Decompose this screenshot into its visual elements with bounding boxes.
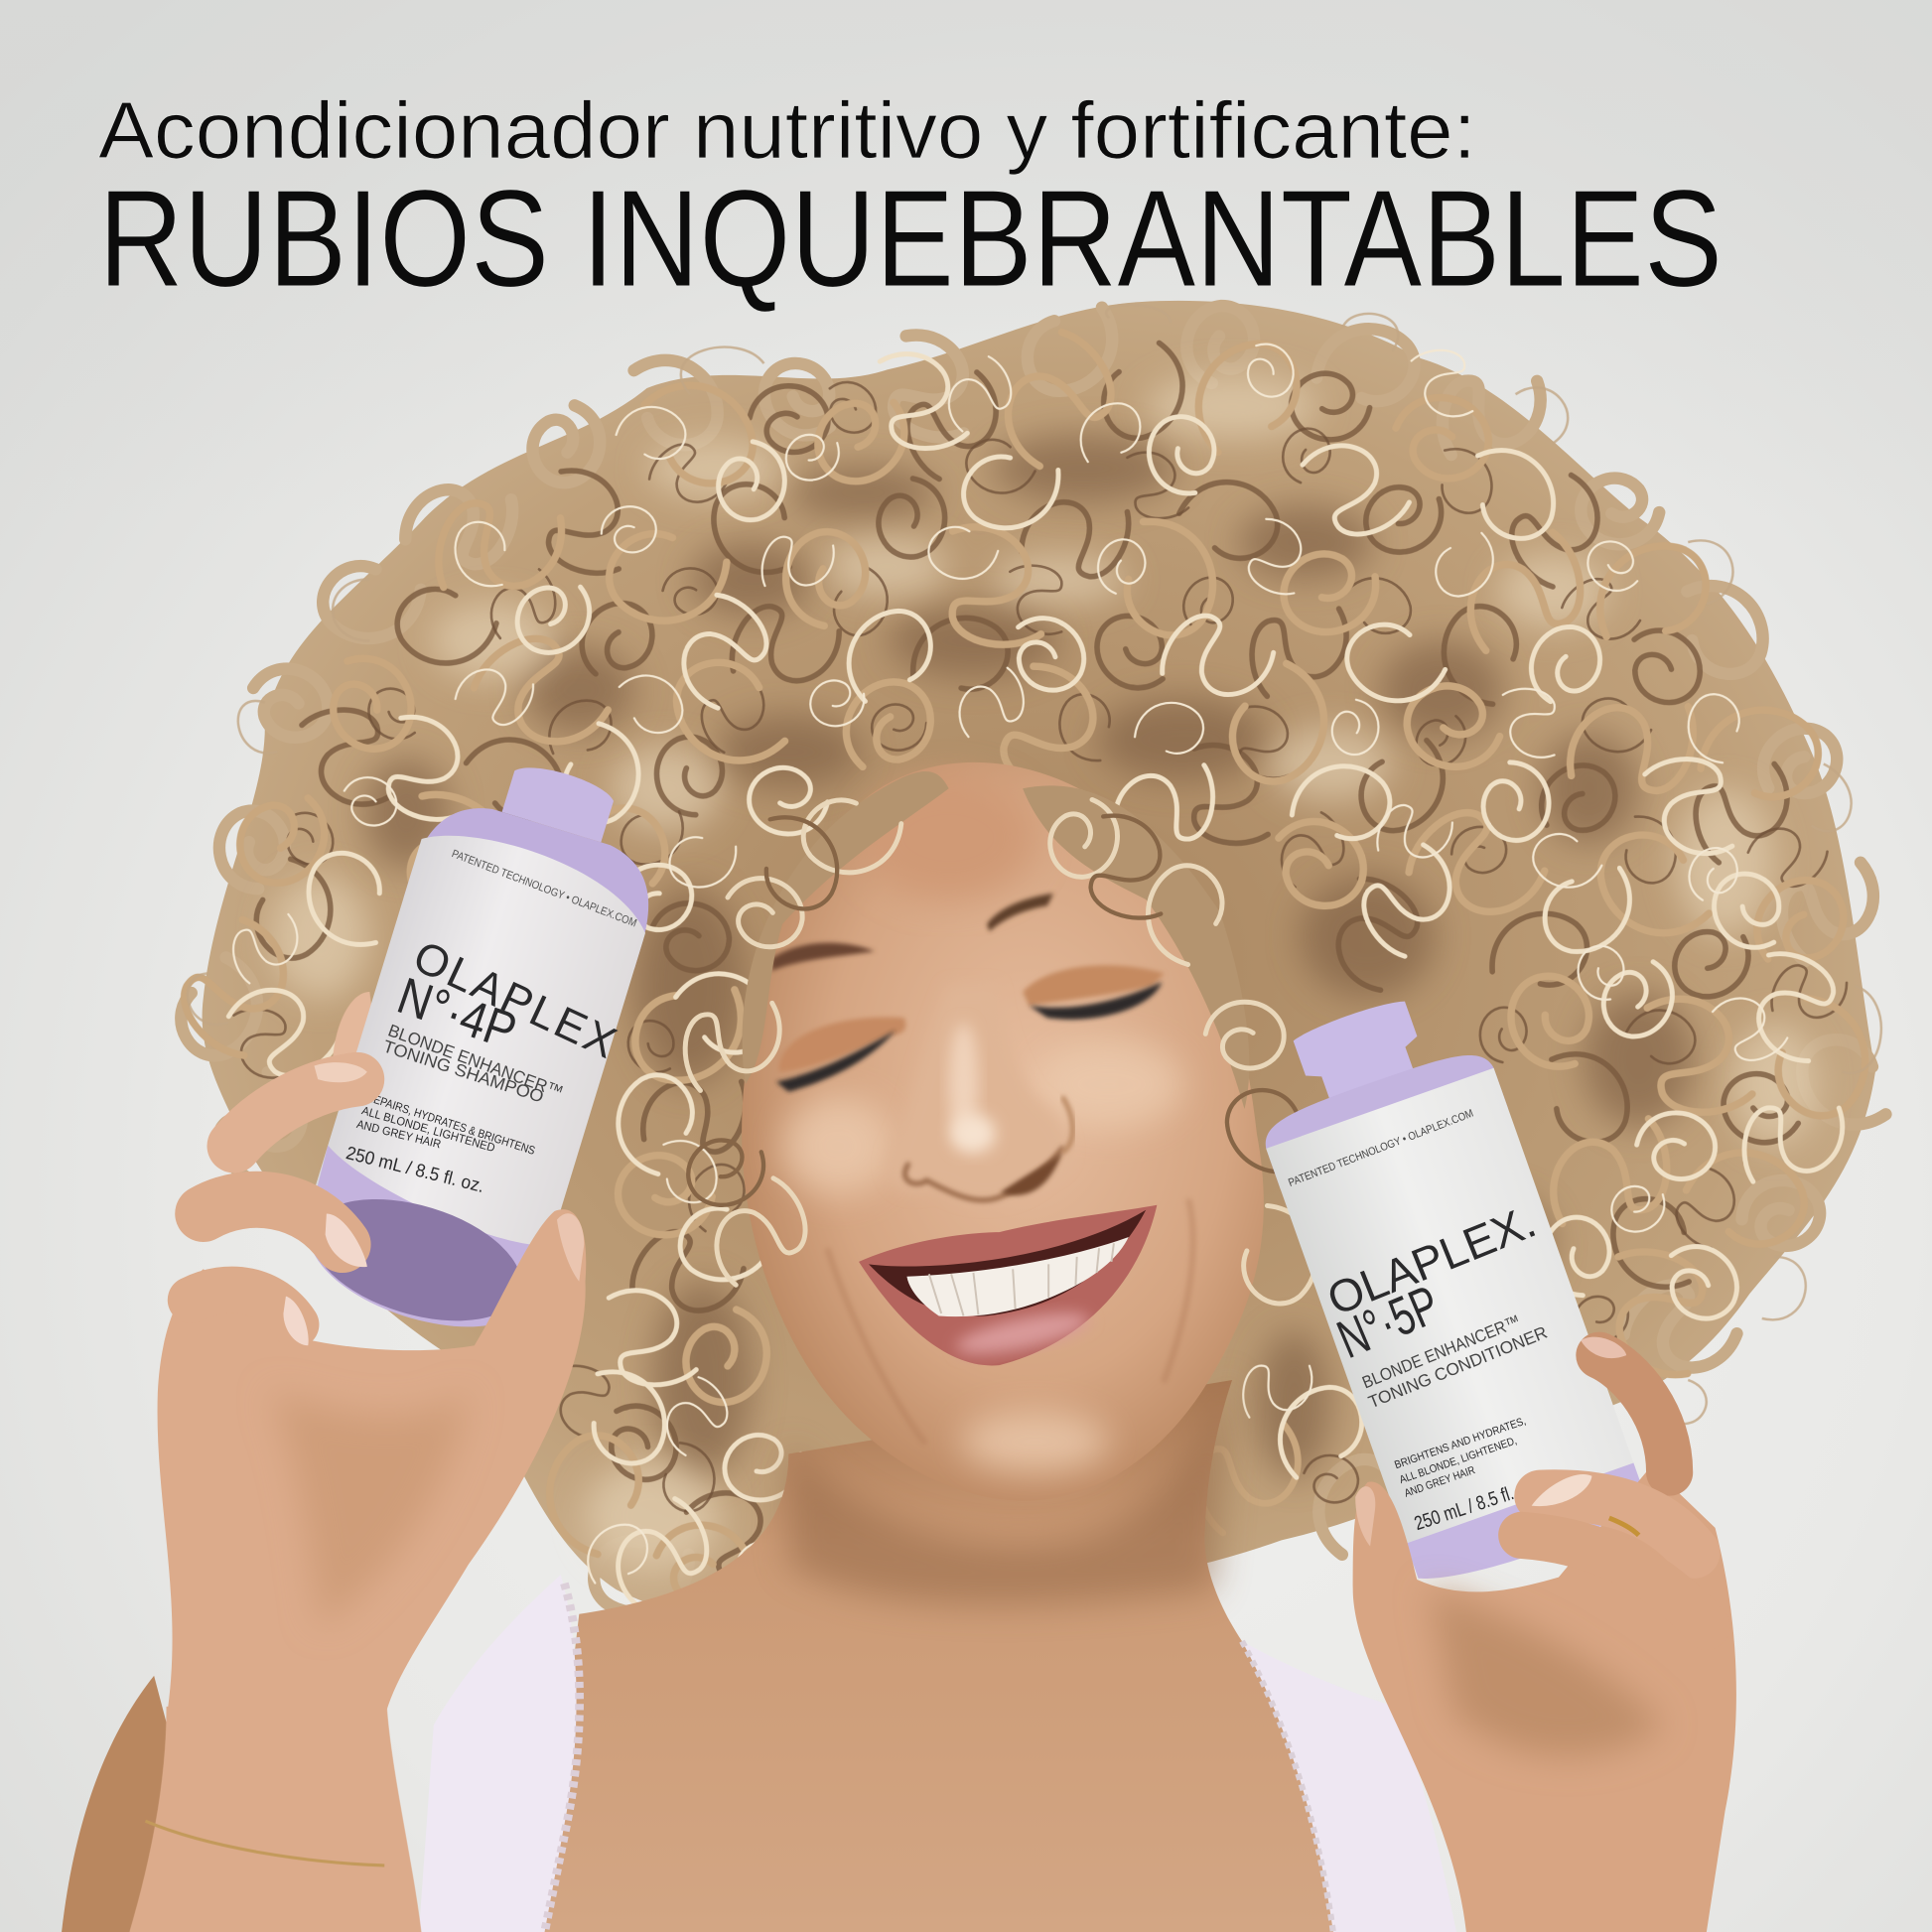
- shampoo label text: N°·4P: [390, 967, 523, 1061]
- left eyelid: [778, 1017, 905, 1072]
- title line one: Acondicionador nutritivo y fortificante:: [98, 86, 1476, 176]
- shampoo shoulder: [403, 792, 667, 969]
- right top strap: [1242, 1641, 1456, 1932]
- conditioner label text: BLONDE ENHANCER™: [1359, 1311, 1523, 1392]
- right eyebrow: [987, 894, 1053, 931]
- right eyelid: [1023, 965, 1165, 1006]
- shampoo label: [310, 819, 658, 1275]
- shampoo label text: AND GREY HAIR: [355, 1118, 442, 1152]
- conditioner label text: [1287, 1108, 1550, 1535]
- shampoo cap: [502, 759, 618, 842]
- conditioner base: [1406, 1462, 1651, 1593]
- left top strap: [419, 1575, 580, 1932]
- tooth gaps: [929, 1243, 1114, 1315]
- shampoo label text: OLAPLEX: [406, 932, 623, 1068]
- title: [98, 86, 1723, 316]
- shampoo bottle No.4P: [287, 739, 683, 1351]
- conditioner label text: ALL BLONDE, LIGHTENED,: [1398, 1435, 1518, 1486]
- irregular hair edge: [166, 294, 1890, 1629]
- middle finger: [204, 1199, 343, 1244]
- neck shadow: [788, 1368, 1232, 1604]
- ring finger: [191, 1290, 296, 1324]
- left shoulder and upper arm: [62, 1676, 221, 1932]
- forehead glow: [863, 776, 1035, 899]
- conditioner bottle No.5P: [1233, 976, 1651, 1593]
- shampoo label text: REPAIRS, HYDRATES & BRIGHTENS: [365, 1091, 537, 1158]
- shampoo label text: [345, 848, 638, 1196]
- right eyelashes: [1029, 982, 1162, 1020]
- shampoo label text: TONING SHAMPOO: [380, 1035, 546, 1107]
- conditioner label text: N°·5P: [1329, 1274, 1448, 1370]
- mid tone curl strands: [161, 323, 1883, 1621]
- middle fingernail: [326, 1213, 367, 1267]
- fingertip behind bottle: [333, 992, 382, 1084]
- flyaway strands: [188, 305, 1881, 1424]
- conditioner label: [1266, 1068, 1633, 1544]
- third finger: [1522, 1535, 1707, 1626]
- cheek glow: [782, 1039, 1182, 1471]
- second fingernail: [1532, 1474, 1591, 1506]
- hair highlight patches: [271, 374, 1818, 1571]
- conditioner label text: AND GREY HAIR: [1403, 1464, 1476, 1500]
- ring fingernail: [283, 1297, 309, 1345]
- teeth: [906, 1237, 1129, 1316]
- thumb nail: [1355, 1486, 1375, 1547]
- fine dark strands: [217, 372, 1854, 1518]
- dark curl strands: [242, 339, 1811, 1589]
- shampoo base: [287, 1146, 559, 1351]
- hair mass behind the face: [161, 294, 1890, 1629]
- shampoo label text: PATENTED TECHNOLOGY • OLAPLEX.COM: [450, 848, 638, 930]
- second finger: [1540, 1495, 1694, 1553]
- top fingernail: [1581, 1337, 1626, 1358]
- shampoo label text: BLONDE ENHANCER™: [385, 1020, 566, 1102]
- fine light strands: [233, 340, 1790, 1594]
- right hand: [1353, 1337, 1736, 1932]
- neck and chest: [542, 1380, 1343, 1932]
- conditioner label text: OLAPLEX.: [1320, 1195, 1543, 1325]
- face: [742, 762, 1264, 1501]
- shampoo bottom disc: [297, 1176, 536, 1343]
- palm shadow: [271, 1392, 469, 1626]
- left eyebrow: [771, 943, 875, 971]
- fringe over forehead: [678, 771, 1331, 1312]
- shampoo label text: ALL BLONDE, LIGHTENED: [360, 1104, 496, 1155]
- mouth: [859, 1205, 1157, 1365]
- left eyelashes: [776, 1031, 896, 1092]
- hair shadow patches: [363, 434, 1694, 1478]
- conditioner label text: 250 mL / 8.5 fl. OZ: [1412, 1474, 1542, 1535]
- nose: [889, 986, 1073, 1201]
- shampoo label text: 250 mL / 8.5 fl. oz.: [345, 1142, 486, 1196]
- smile creases: [828, 1201, 1193, 1442]
- conditioner label text: TONING CONDITIONER: [1365, 1322, 1550, 1412]
- bracelet: [145, 1821, 384, 1865]
- ring: [1609, 1518, 1639, 1535]
- index fingernail: [314, 1062, 367, 1082]
- conditioner cap: [1292, 996, 1428, 1105]
- light curl strands: [224, 348, 1859, 1607]
- top finger: [1599, 1355, 1670, 1472]
- left thumb nail: [557, 1213, 584, 1282]
- conditioner shoulder: [1257, 1042, 1508, 1189]
- conditioner label text: BRIGHTENS AND HYDRATES,: [1393, 1416, 1528, 1471]
- index finger: [234, 1079, 357, 1146]
- forearm: [129, 1707, 421, 1932]
- conditioner label text: PATENTED TECHNOLOGY • OLAPLEX.COM: [1287, 1108, 1475, 1189]
- palm shadow: [1430, 1589, 1663, 1756]
- left hand: [158, 1062, 586, 1719]
